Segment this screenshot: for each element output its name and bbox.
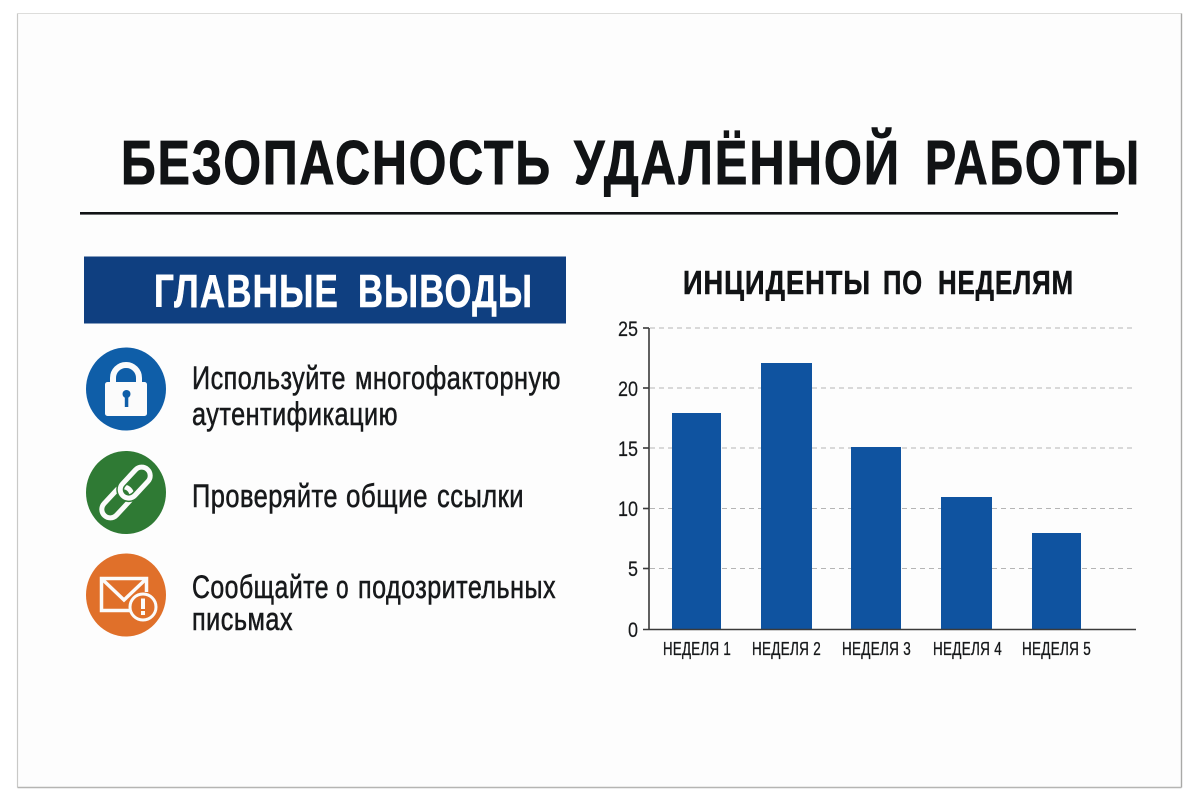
y axis labels: 10 — [618, 497, 638, 521]
heading banner: ВЫВОДЫ — [358, 265, 533, 317]
x axis labels: НЕДЕЛЯ 3 — [842, 639, 911, 659]
y axis labels: 20 — [618, 377, 638, 401]
icon: padlock — [86, 348, 166, 430]
takeaway: check shared links — [86, 451, 524, 534]
takeaway: multi-factor authentication — [86, 348, 570, 432]
y axis labels: 15 — [618, 437, 638, 461]
icon: chain link — [86, 451, 166, 534]
x axis labels: НЕДЕЛЯ 5 — [1022, 639, 1091, 659]
text: многофакторную — [355, 360, 561, 396]
x axis labels — [663, 639, 1091, 659]
y axis labels: 0 — [628, 618, 638, 642]
y axis labels: 5 — [628, 557, 638, 581]
text: общие — [346, 478, 428, 514]
text: письмах — [192, 601, 293, 637]
chart title: НЕДЕЛЯМ — [938, 265, 1074, 302]
text: Сообщайте — [192, 569, 329, 605]
y axis labels — [618, 317, 638, 642]
bars — [672, 363, 1081, 630]
text: о — [336, 569, 349, 605]
chart title: ИНЦИДЕНТЫ — [683, 265, 871, 302]
takeaway: report suspicious emails — [86, 554, 566, 637]
text: ссылки — [437, 478, 524, 514]
y axis labels: 25 — [618, 317, 638, 341]
text: аутентификацию — [192, 396, 398, 432]
axes — [643, 328, 1136, 630]
x axis labels: НЕДЕЛЯ 1 — [663, 639, 731, 659]
chart title: ПО — [883, 265, 923, 302]
text: Используйте — [192, 360, 346, 396]
panel: incidents chart — [618, 265, 1136, 659]
x axis labels: НЕДЕЛЯ 2 — [752, 639, 821, 659]
text: Проверяйте — [192, 478, 338, 514]
x axis labels: НЕДЕЛЯ 4 — [933, 639, 1002, 659]
panel: key takeaways — [84, 256, 570, 637]
title: БЕЗОПАСНОСТЬ — [121, 128, 552, 198]
icon: envelope with alert — [86, 554, 166, 636]
bar chart — [618, 317, 1136, 659]
title: УДАЛЁННОЙ — [574, 127, 901, 198]
text: подозрительных — [358, 569, 556, 605]
heading banner: ГЛАВНЫЕ — [154, 265, 339, 317]
heading banner — [84, 256, 566, 324]
